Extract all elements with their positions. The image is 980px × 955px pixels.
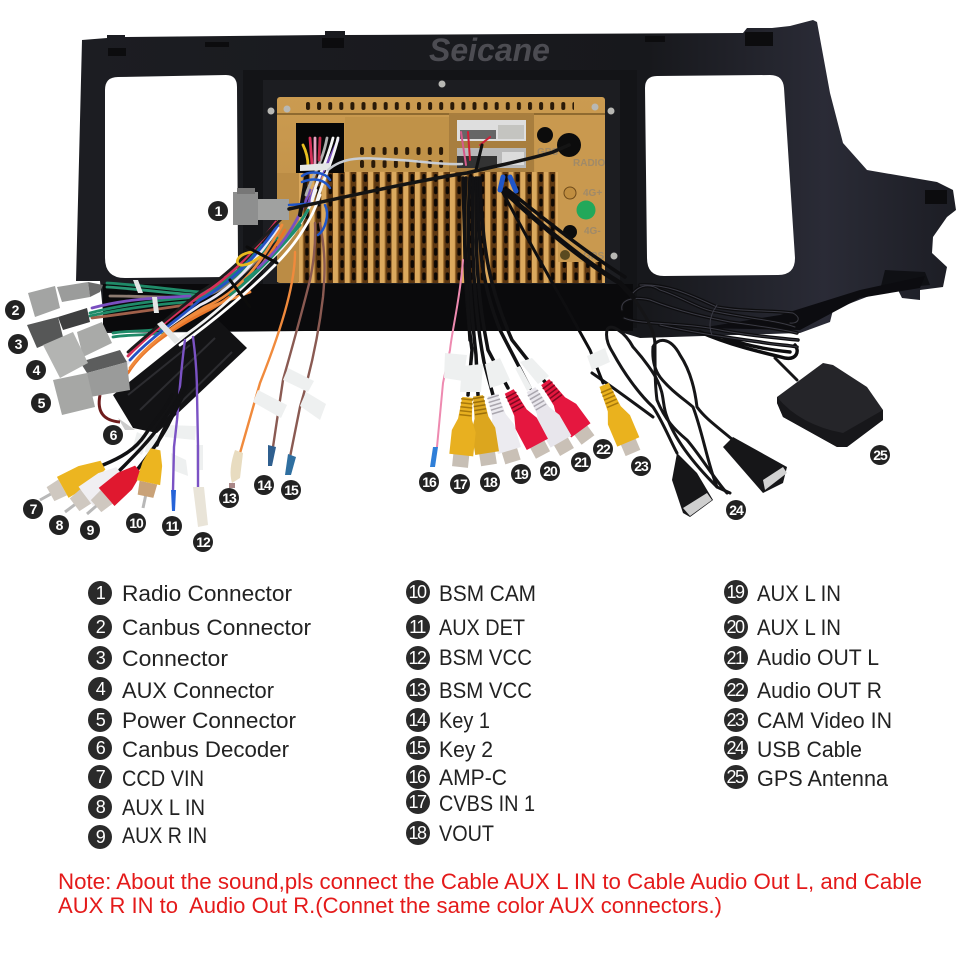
legend column 2: 18 [408, 823, 427, 843]
legend column 3 [724, 580, 892, 791]
legend column 2: 16 [408, 767, 427, 787]
male RCA plugs 7 to 10 [34, 447, 167, 523]
legend column 3: 23 [726, 710, 745, 730]
legend column 3: 22 [726, 680, 745, 700]
photo number badges: 6 [110, 427, 118, 443]
gold radio chassis [268, 80, 618, 283]
connector 3 [27, 308, 90, 348]
legend column 2: 14 [408, 710, 427, 730]
antenna ports and stickers: 4G- [584, 226, 601, 237]
legend column 1: 6 [96, 738, 106, 758]
blue wire loop on harness [289, 173, 330, 235]
red note [58, 869, 922, 918]
legend column 1: AUX L IN [122, 795, 205, 820]
legend column 2: BSM VCC [439, 678, 532, 703]
black RCA cable bundle, right [463, 178, 545, 395]
legend column 3: AUX L IN [757, 615, 841, 640]
black harness ties [230, 247, 277, 307]
legend column 3: 25 [726, 767, 745, 787]
photo number badges: 4 [33, 362, 41, 378]
legend column 2: BSM VCC [439, 645, 532, 670]
brand watermark: Seicane [429, 32, 550, 68]
legend column 2: 11 [409, 617, 426, 637]
white rear sockets [457, 120, 526, 168]
connector 4 [43, 322, 112, 378]
legend column 3: GPS Antenna [757, 766, 889, 791]
antenna ports and stickers [296, 123, 605, 262]
legend column 3: CAM Video IN [757, 708, 892, 733]
legend column 3: 24 [726, 738, 745, 758]
blue AMP terminal [430, 447, 438, 467]
legend column 2: Key 2 [439, 737, 493, 762]
legend column 3: Audio OUT R [757, 678, 882, 703]
photo number badges: 7 [30, 501, 38, 517]
legend column 1: 2 [96, 617, 106, 637]
legend column 2: CVBS IN 1 [439, 791, 535, 816]
brown wires 14 and 15 [268, 223, 325, 475]
legend column 1: Canbus Decoder [122, 737, 289, 762]
photo number badges: 25 [873, 447, 888, 463]
photo number badges: 17 [453, 476, 468, 492]
legend column 1: Radio Connector [122, 581, 292, 606]
wiring harness [90, 138, 338, 373]
photo number badges: 13 [222, 490, 237, 506]
legend column 2: 15 [408, 738, 427, 758]
legend column 3: USB Cable [757, 737, 862, 762]
photo number badges: 20 [543, 463, 558, 479]
USB and camera cables on chassis [500, 187, 633, 383]
photo number badges: 18 [483, 474, 498, 490]
female RCA connectors 17 to 23 [448, 375, 644, 468]
legend column 1: 7 [96, 767, 106, 787]
photo number badges: 2 [12, 302, 20, 318]
photo number badges: 14 [257, 477, 272, 493]
pink AMP wire [437, 260, 463, 447]
red note: AUX R IN to Audio Out R.(Connet the same color AUX connectors.) [58, 893, 722, 918]
antenna ports and stickers: GPS [583, 251, 604, 262]
wire labels, right [444, 348, 610, 392]
antenna ports and stickers: GPS [537, 147, 558, 158]
legend column 3: 20 [726, 617, 745, 637]
red note: Note: About the sound,pls connect the Cable AUX L IN to Cable Audio Out L, and Cable [58, 869, 922, 894]
USB cables [592, 297, 733, 493]
connector 2 [28, 282, 103, 317]
GPS antenna cable coil [622, 285, 798, 380]
photo number badges: 15 [284, 482, 299, 498]
screws [268, 80, 618, 260]
legend column 1: AUX Connector [122, 678, 274, 703]
legend column 1: Power Connector [122, 708, 296, 733]
canbus decoder box [99, 315, 247, 433]
black RCA cables, left [103, 365, 192, 470]
blue spade clips [500, 177, 516, 191]
antenna ports and stickers: RADIO [573, 158, 605, 169]
legend column 1: 3 [96, 648, 106, 668]
legend column 3: Audio OUT L [757, 645, 879, 670]
legend column 1: 9 [96, 827, 106, 847]
legend column 2: 12 [408, 648, 427, 668]
legend column 3: 19 [726, 582, 745, 602]
legend column 1: 5 [96, 710, 106, 730]
photo number badges: 3 [15, 336, 23, 352]
legend column 1: Canbus Connector [122, 615, 311, 640]
legend column 1: 8 [96, 797, 106, 817]
photo number badges: 16 [422, 474, 437, 490]
photo number badges: 8 [56, 517, 64, 533]
legend column 3: 21 [726, 648, 745, 668]
photo number badges [5, 201, 890, 552]
legend column 1: AUX R IN [122, 823, 207, 848]
legend column 2: 17 [408, 792, 427, 812]
legend column 1: Connector [122, 646, 228, 671]
black radio antenna cable [289, 145, 569, 209]
legend column 1: 1 [96, 583, 106, 603]
head unit frame [76, 20, 956, 338]
wire labels, left [132, 368, 326, 476]
photo number badges: 1 [215, 203, 223, 219]
legend column 2: AMP-C [439, 765, 507, 790]
photo number badges: 12 [196, 534, 211, 550]
legend column 1 [88, 581, 311, 849]
photo number badges: 11 [166, 518, 180, 534]
photo number badges: 9 [87, 522, 95, 538]
legend column 3: AUX L IN [757, 581, 841, 606]
antenna ports and stickers: 4G+ [583, 188, 602, 199]
legend column 2 [406, 580, 536, 846]
photo number badges: 22 [596, 441, 611, 457]
legend column 1: 4 [96, 679, 106, 699]
photo number badges: 23 [634, 458, 649, 474]
legend column 2: Key 1 [439, 708, 490, 733]
photo number badges: 24 [729, 502, 744, 518]
legend column 2: AUX DET [439, 615, 525, 640]
photo number badges: 21 [574, 454, 589, 470]
GPS antenna puck [777, 363, 883, 447]
USB connectors [672, 437, 787, 517]
white cable ties [133, 163, 330, 344]
photo number badges: 10 [129, 515, 144, 531]
grey connector 1 [233, 188, 289, 225]
photo number badges: 5 [38, 395, 46, 411]
purple wires 11 and 12 [171, 337, 208, 527]
rear sockets wires [461, 132, 490, 170]
legend column 1: CCD VIN [122, 766, 204, 791]
grey signal wire [328, 158, 462, 170]
orange wire and terminal 13 [229, 252, 295, 488]
legend column 2: 10 [408, 582, 427, 602]
legend column 2: 13 [408, 680, 427, 700]
legend column 2: VOUT [439, 821, 494, 846]
connector 5 [53, 350, 130, 415]
photo number badges: 19 [514, 466, 529, 482]
legend column 2: BSM CAM [439, 581, 536, 606]
